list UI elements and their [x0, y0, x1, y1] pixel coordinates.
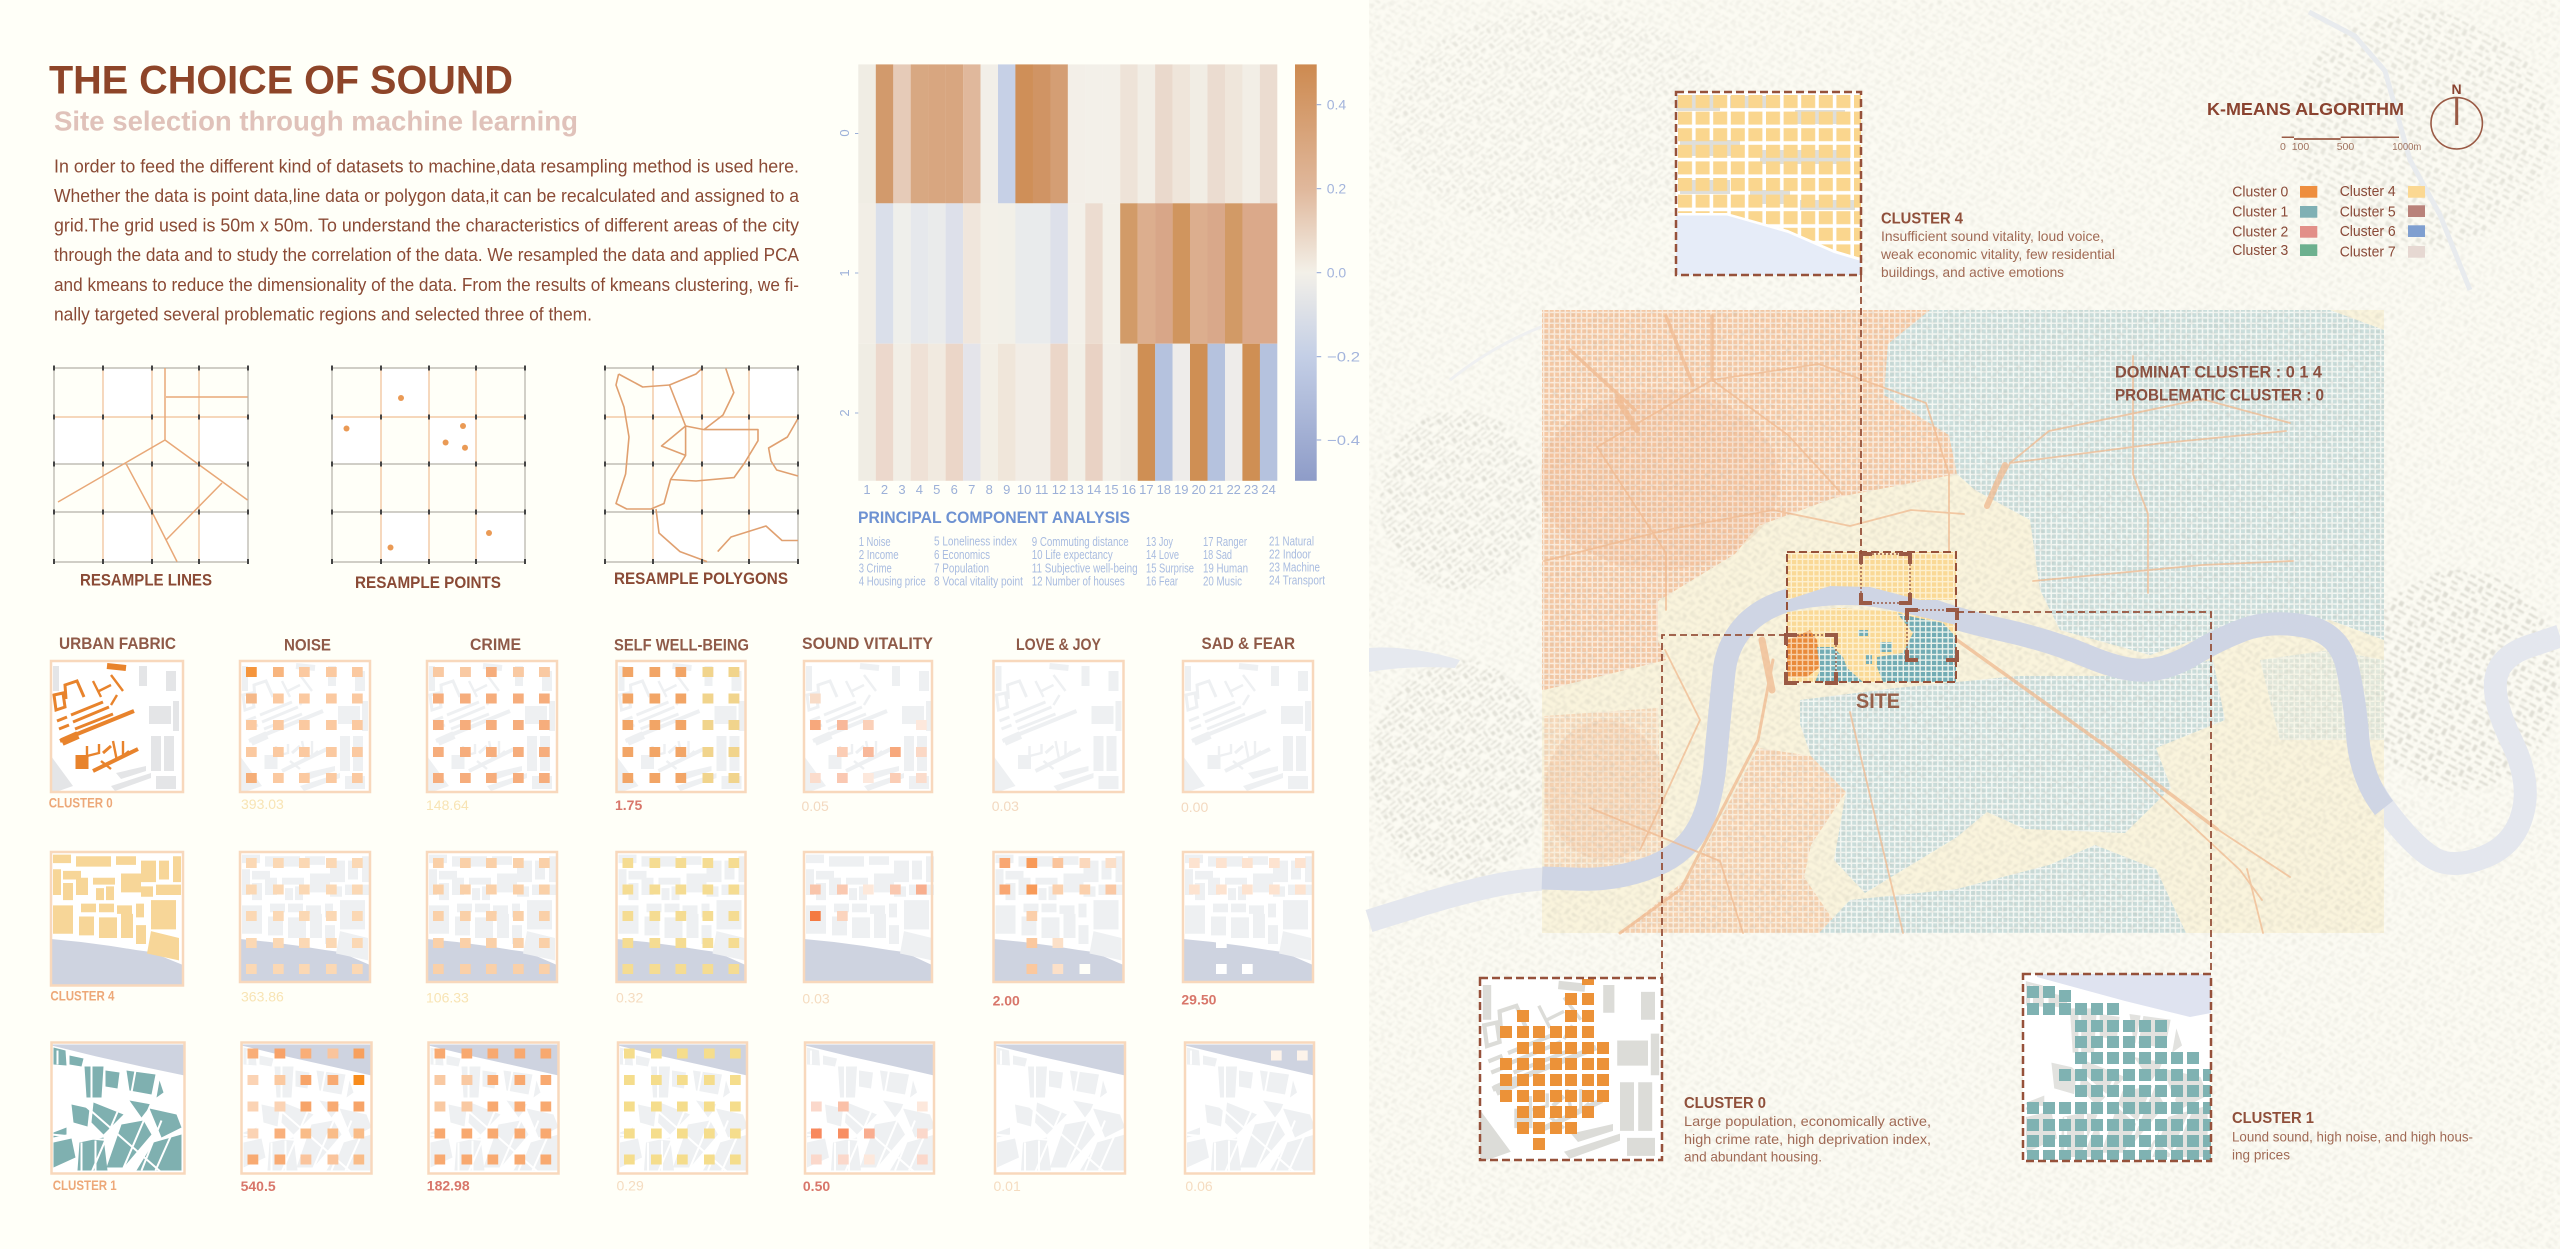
- legend: variable list: 21 Natural: [1269, 535, 1314, 549]
- icon: north arrow: N: [2451, 81, 2462, 97]
- text: cluster 1 description: ing prices: [2232, 1146, 2290, 1162]
- values: cluster 1 row: CLUSTER 1: [53, 1177, 117, 1193]
- colorbar: 0.4: [1327, 96, 1346, 112]
- heatmap axis labels: 21: [1209, 482, 1223, 497]
- legend: variable list: 18 Sad: [1203, 548, 1232, 562]
- scale bar: 0: [2280, 141, 2286, 153]
- legend: variable list: 10 Life expectancy: [1032, 548, 1113, 562]
- heatmap axis labels: 24: [1261, 482, 1276, 497]
- text: cluster 1 description: CLUSTER 1: [2232, 1110, 2314, 1127]
- legend: clusters: Cluster 7: [2340, 245, 2396, 261]
- site boundary: [1787, 552, 1956, 682]
- text block: introduction: through the data and to study the correlation of the data. We resampled the data and applied PCA: [54, 245, 799, 265]
- legend: variable list: 20 Music: [1203, 574, 1242, 588]
- text block: introduction: nally targeted several problematic regions and selected three of them.: [54, 304, 592, 324]
- heatmap axis labels: 3: [898, 482, 906, 497]
- heatmap axis labels: 12: [1052, 482, 1066, 497]
- text: cluster 1 description: [2232, 1110, 2473, 1162]
- map: k-means cluster overlay: [1540, 310, 2384, 933]
- values: cluster 1 row: [53, 1177, 1213, 1194]
- values: cluster 0 row: [49, 794, 1208, 815]
- map: sad and fear cluster 4: [1183, 852, 1313, 982]
- map: selection brackets: [1786, 554, 1957, 683]
- legend: variable list: 9 Commuting distance: [1032, 535, 1129, 549]
- legend: variable list: 1 Noise: [859, 535, 891, 549]
- text: cluster 0 description: CLUSTER 0: [1684, 1095, 1766, 1112]
- heatmap: principal components: [837, 64, 1277, 497]
- map: sound vitality cluster 0: [804, 661, 932, 792]
- map: self well-being cluster 1: [618, 1042, 748, 1174]
- heatmap axis labels: 9: [1003, 482, 1010, 497]
- heatmap axis labels: 19: [1174, 482, 1189, 497]
- heatmap axis labels: 0: [837, 129, 852, 137]
- heatmap axis labels: 7: [968, 482, 975, 497]
- column headings: LOVE & JOY: [1016, 635, 1102, 654]
- heatmap axis labels: 2: [881, 482, 888, 497]
- legend: variable list: 7 Population: [934, 561, 989, 575]
- map: love and joy cluster 4: [994, 852, 1124, 982]
- values: cluster 1 row: 0.06: [1185, 1178, 1213, 1194]
- map: street network: [1544, 316, 2293, 933]
- scale bar: 1000m: [2392, 141, 2422, 153]
- text: cluster 0 description: [1684, 1095, 1931, 1164]
- connector: cluster 1: [1957, 612, 2211, 974]
- heatmap axis labels: [837, 129, 1276, 497]
- legend: variable list: 5 Loneliness index: [934, 534, 1018, 548]
- scale bar: 500: [2337, 141, 2354, 153]
- map: urban fabric cluster 1: [52, 1042, 184, 1174]
- text: cluster 1 description: Lound sound, high noise, and high hous-: [2232, 1128, 2473, 1144]
- column headings: CRIME: [470, 635, 521, 654]
- legend: variable list: 15 Surprise: [1146, 561, 1194, 575]
- map: urban fabric cluster 4: [51, 852, 183, 986]
- connector: cluster 0: [1662, 635, 1786, 978]
- values: cluster 1 row: 0.29: [616, 1178, 644, 1194]
- map: noise cluster 1: [242, 1042, 372, 1174]
- map: noise cluster 4: [240, 852, 370, 982]
- values: cluster 1 row: 0.50: [803, 1178, 830, 1194]
- text block: introduction: [54, 156, 800, 324]
- heatmap axis labels: 1: [837, 269, 852, 277]
- legend: clusters: Cluster 0: [2232, 185, 2288, 201]
- values: cluster 4 row: CLUSTER 4: [50, 988, 115, 1004]
- heatmap axis labels: 15: [1104, 482, 1119, 497]
- map: noise cluster 0: [240, 661, 370, 792]
- legend: variable list: 11 Subjective well-being: [1032, 561, 1138, 575]
- map: sound vitality cluster 4: [804, 852, 934, 982]
- map: love and joy cluster 1: [995, 1042, 1125, 1174]
- heatmap axis labels: 2: [837, 409, 852, 417]
- values: cluster 4 row: 106.33: [426, 990, 469, 1006]
- colorbar: 0.0: [1327, 264, 1346, 280]
- legend: variable list: 8 Vocal vitality point: [934, 574, 1023, 588]
- column headings: SAD & FEAR: [1202, 634, 1295, 653]
- label: resample lines: RESAMPLE LINES: [80, 572, 212, 590]
- heatmap axis labels: 1: [863, 482, 871, 497]
- map: self well-being cluster 0: [616, 661, 746, 792]
- text: cluster 4 description: [1880, 210, 2115, 280]
- text: cluster 4 description: weak economic vitality, few residential: [1880, 246, 2115, 262]
- map: self well-being cluster 4: [616, 852, 746, 982]
- legend: variable list: 6 Economics: [934, 548, 990, 562]
- text: cluster 0 description: Large population, economically active,: [1684, 1113, 1931, 1129]
- legend: variable list: 3 Crime: [859, 561, 892, 575]
- heatmap axis labels: 18: [1157, 482, 1171, 497]
- values: cluster 0 row: 1.75: [615, 797, 642, 813]
- legend: clusters: Cluster 2: [2232, 225, 2288, 241]
- legend: variable list: 23 Machine: [1269, 561, 1320, 575]
- text: cluster 4 description: CLUSTER 4: [1881, 210, 1963, 228]
- map: river thames: [1542, 594, 2384, 879]
- text: dominant and problematic clusters: DOMINAT CLUSTER : 0 1 4: [2115, 364, 2323, 382]
- heading: k-means algorithm: K-MEANS ALGORITHM: [2207, 99, 2404, 119]
- label: resample polygons: RESAMPLE POLYGONS: [614, 570, 788, 588]
- label: resample points: RESAMPLE POINTS: [355, 574, 501, 592]
- inset: cluster 1 grid: [2023, 974, 2211, 1161]
- heatmap axis labels: 13: [1069, 482, 1084, 497]
- legend: clusters: Cluster 4: [2340, 184, 2396, 200]
- column headings: SOUND VITALITY: [802, 634, 934, 653]
- label: site: SITE: [1856, 690, 1900, 713]
- heatmap axis labels: 14: [1087, 482, 1101, 497]
- row: cluster 4 maps: [51, 852, 1313, 986]
- column headings: SELF WELL-BEING: [614, 636, 749, 654]
- diagram: resample points: [332, 366, 525, 592]
- legend: variable list: [859, 534, 1325, 588]
- values: cluster 0 row: 0.00: [1181, 799, 1208, 815]
- scale bar: 100: [2292, 141, 2309, 153]
- map: crime cluster 4: [427, 852, 557, 982]
- title: THE CHOICE OF SOUND: [49, 58, 513, 102]
- legend: variable list: 14 Love: [1146, 548, 1179, 562]
- legend: variable list: 19 Human: [1203, 561, 1248, 575]
- map: love and joy cluster 0: [994, 661, 1124, 792]
- text: cluster 0 description: and abundant housing.: [1684, 1148, 1822, 1164]
- legend: clusters: Cluster 1: [2232, 205, 2288, 221]
- values: cluster 4 row: 2.00: [993, 992, 1020, 1008]
- diagram: resample polygons: [605, 366, 798, 588]
- subtitle: Site selection through machine learning: [54, 106, 578, 136]
- text: dominant and problematic clusters: PROBLEMATIC CLUSTER : 0: [2115, 386, 2324, 404]
- values: cluster 4 row: 0.03: [802, 990, 830, 1006]
- text: cluster 4 description: Insufficient sound vitality, loud voice,: [1881, 228, 2104, 244]
- legend: variable list: 22 Indoor: [1269, 548, 1311, 562]
- map: sound vitality cluster 1: [805, 1042, 935, 1174]
- column headings: [59, 634, 1295, 654]
- colorbar: −0.4: [1327, 432, 1360, 448]
- values: cluster 4 row: 363.86: [241, 988, 284, 1004]
- values: cluster 0 row: 148.64: [426, 797, 469, 813]
- values: cluster 0 row: CLUSTER 0: [49, 794, 113, 810]
- column headings: URBAN FABRIC: [59, 634, 176, 653]
- legend: clusters: Cluster 3: [2232, 243, 2288, 259]
- text block: introduction: Whether the data is point data,line data or polygon data,it can be recalculated and assigned to a: [54, 186, 800, 206]
- row: cluster 1 maps: [52, 1042, 1315, 1174]
- heatmap axis labels: 11: [1035, 482, 1048, 497]
- colorbar: −0.2: [1327, 348, 1360, 364]
- values: cluster 0 row: 0.03: [992, 798, 1019, 814]
- legend: clusters: Cluster 6: [2340, 224, 2396, 240]
- values: cluster 4 row: [50, 988, 1217, 1008]
- text: cluster 4 description: buildings, and active emotions: [1881, 264, 2064, 280]
- row: cluster 0 maps: [51, 661, 1313, 792]
- values: cluster 1 row: 540.5: [241, 1178, 276, 1194]
- legend: variable list: 13 Joy: [1146, 535, 1174, 549]
- values: cluster 1 row: 182.98: [427, 1178, 470, 1194]
- heatmap axis labels: 23: [1244, 482, 1258, 497]
- values: cluster 0 row: 393.03: [241, 796, 284, 812]
- text block: introduction: grid.The grid used is 50m x 50m. To understand the characteristics of different areas of the city: [54, 216, 799, 236]
- colorbar: [1295, 64, 1360, 481]
- map: crime cluster 0: [427, 661, 557, 792]
- map: sad and fear cluster 0: [1183, 661, 1313, 792]
- map: crime cluster 1: [428, 1042, 558, 1174]
- values: cluster 0 row: 0.05: [802, 798, 829, 814]
- column headings: NOISE: [284, 636, 331, 654]
- legend: variable list: 2 Income: [859, 548, 899, 562]
- values: cluster 4 row: 29.50: [1181, 992, 1217, 1008]
- legend: clusters: [2232, 184, 2425, 261]
- panel: city map: [1369, 0, 2560, 1249]
- icon: north arrow: [2431, 81, 2482, 149]
- map: sad and fear cluster 1: [1185, 1042, 1315, 1174]
- legend: variable list: 24 Transport: [1269, 574, 1325, 588]
- text block: introduction: and kmeans to reduce the dimensionality of the data. From the results of kmeans clustering, we fi-: [54, 275, 799, 295]
- heatmap axis labels: 5: [933, 482, 940, 497]
- scale bar: [2280, 137, 2422, 153]
- inset: cluster 4 grid: [1676, 92, 1861, 275]
- text: dominant and problematic clusters: [2115, 364, 2324, 404]
- inset: cluster 0 grid: [1480, 978, 1662, 1160]
- values: cluster 1 row: 0.01: [994, 1178, 1021, 1194]
- heading: principal component analysis: PRINCIPAL COMPONENT ANALYSIS: [858, 509, 1130, 527]
- legend: variable list: 16 Fear: [1146, 574, 1178, 588]
- colorbar: 0.2: [1327, 180, 1346, 196]
- legend: variable list: 12 Number of houses: [1032, 574, 1125, 588]
- heatmap axis labels: 10: [1017, 482, 1031, 497]
- legend: clusters: Cluster 5: [2340, 205, 2396, 221]
- map: urban fabric cluster 0: [51, 661, 183, 792]
- heatmap axis labels: 6: [951, 482, 958, 497]
- connector: cluster 4: [1860, 275, 1862, 554]
- values: cluster 4 row: 0.32: [616, 990, 643, 1006]
- text: cluster 0 description: high crime rate, high deprivation index,: [1684, 1131, 1931, 1147]
- heatmap axis labels: 16: [1122, 482, 1136, 497]
- heatmap axis labels: 4: [916, 482, 923, 497]
- map: site detail: [1787, 552, 1956, 682]
- heatmap axis labels: 8: [986, 482, 993, 497]
- heatmap axis labels: 20: [1191, 482, 1206, 497]
- heatmap axis labels: 17: [1139, 482, 1154, 497]
- text block: introduction: In order to feed the different kind of datasets to machine,data resampling method is used here.: [54, 156, 799, 176]
- diagram: resample lines: [54, 366, 248, 590]
- heatmap axis labels: 22: [1226, 482, 1241, 497]
- legend: variable list: 4 Housing price: [859, 574, 926, 588]
- legend: variable list: 17 Ranger: [1203, 535, 1247, 549]
